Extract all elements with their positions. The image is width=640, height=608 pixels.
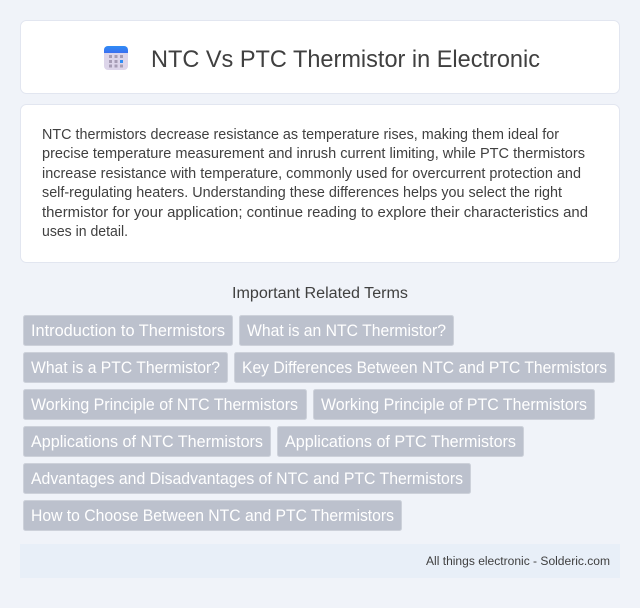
- text block: description: NTC thermistors decrease resistance as temperature rises, making them ideal for: [42, 127, 559, 143]
- chip: Introduction to Thermistors: Introduction to Thermistors: [31, 322, 225, 340]
- chip: Working Principle of NTC: [24, 390, 306, 420]
- panel: title card: [20, 20, 620, 94]
- icon: calendar: [104, 46, 128, 70]
- text block: description: precise temperature measurement and inrush current limiting, while PTC thermistors: [42, 146, 585, 162]
- chip: What is an NTC Thermistor?: What is an NTC Thermistor?: [247, 322, 446, 340]
- heading: related terms: Important Related Terms: [232, 285, 408, 302]
- chip: Advantages and Disadvantages: Advantages and Disadvantages of NTC and PTC Thermistors: [31, 470, 463, 488]
- chip: Applications of PTC: Applications of PTC Thermistors: [285, 433, 516, 451]
- chip: How to Choose: [24, 500, 402, 530]
- chip: Advantages and Disadvantages: [24, 464, 470, 494]
- text block: description: thermistor for your application; continue reading to explore their characteristics and: [42, 205, 588, 221]
- chip: What is a PTC Thermistor?: What is a PTC Thermistor?: [31, 359, 220, 377]
- chip: Introduction to Thermistors: [24, 316, 232, 346]
- chip: What is a PTC Thermistor?: [24, 352, 228, 382]
- chip: Working Principle of PTC: Working Principle of PTC Thermistors: [321, 396, 587, 414]
- text block: description: increase resistance with temperature, commonly used for overcurrent protection and: [42, 166, 581, 182]
- chip: How to Choose: How to Choose Between NTC and PTC Thermistors: [31, 507, 394, 525]
- text block: description: uses in detail.: [42, 224, 128, 240]
- chip: Applications of NTC: Applications of NTC Thermistors: [31, 433, 263, 451]
- chip: What is an NTC Thermistor?: [240, 316, 454, 346]
- panel: description card: [20, 104, 620, 262]
- chip: Applications of NTC: [24, 426, 270, 456]
- chip: Working Principle of NTC: Working Principle of NTC Thermistors: [31, 396, 298, 414]
- footer: All things electronic - Solderic.com: [426, 554, 610, 568]
- chip: Applications of PTC: [278, 426, 524, 456]
- text block: description: [42, 127, 588, 240]
- footer: [20, 544, 620, 578]
- panel: related term chips: [24, 316, 614, 530]
- text block: description: self-regulating heaters. Understanding these differences helps you select the right: [42, 185, 562, 201]
- chip: Working Principle of PTC: [314, 390, 594, 420]
- title: NTC Vs PTC Thermistor in Electronic: [151, 46, 540, 73]
- chip: Key Differences: Key Differences Between NTC and PTC Thermistors: [242, 359, 607, 377]
- chip: Key Differences: [234, 352, 614, 382]
